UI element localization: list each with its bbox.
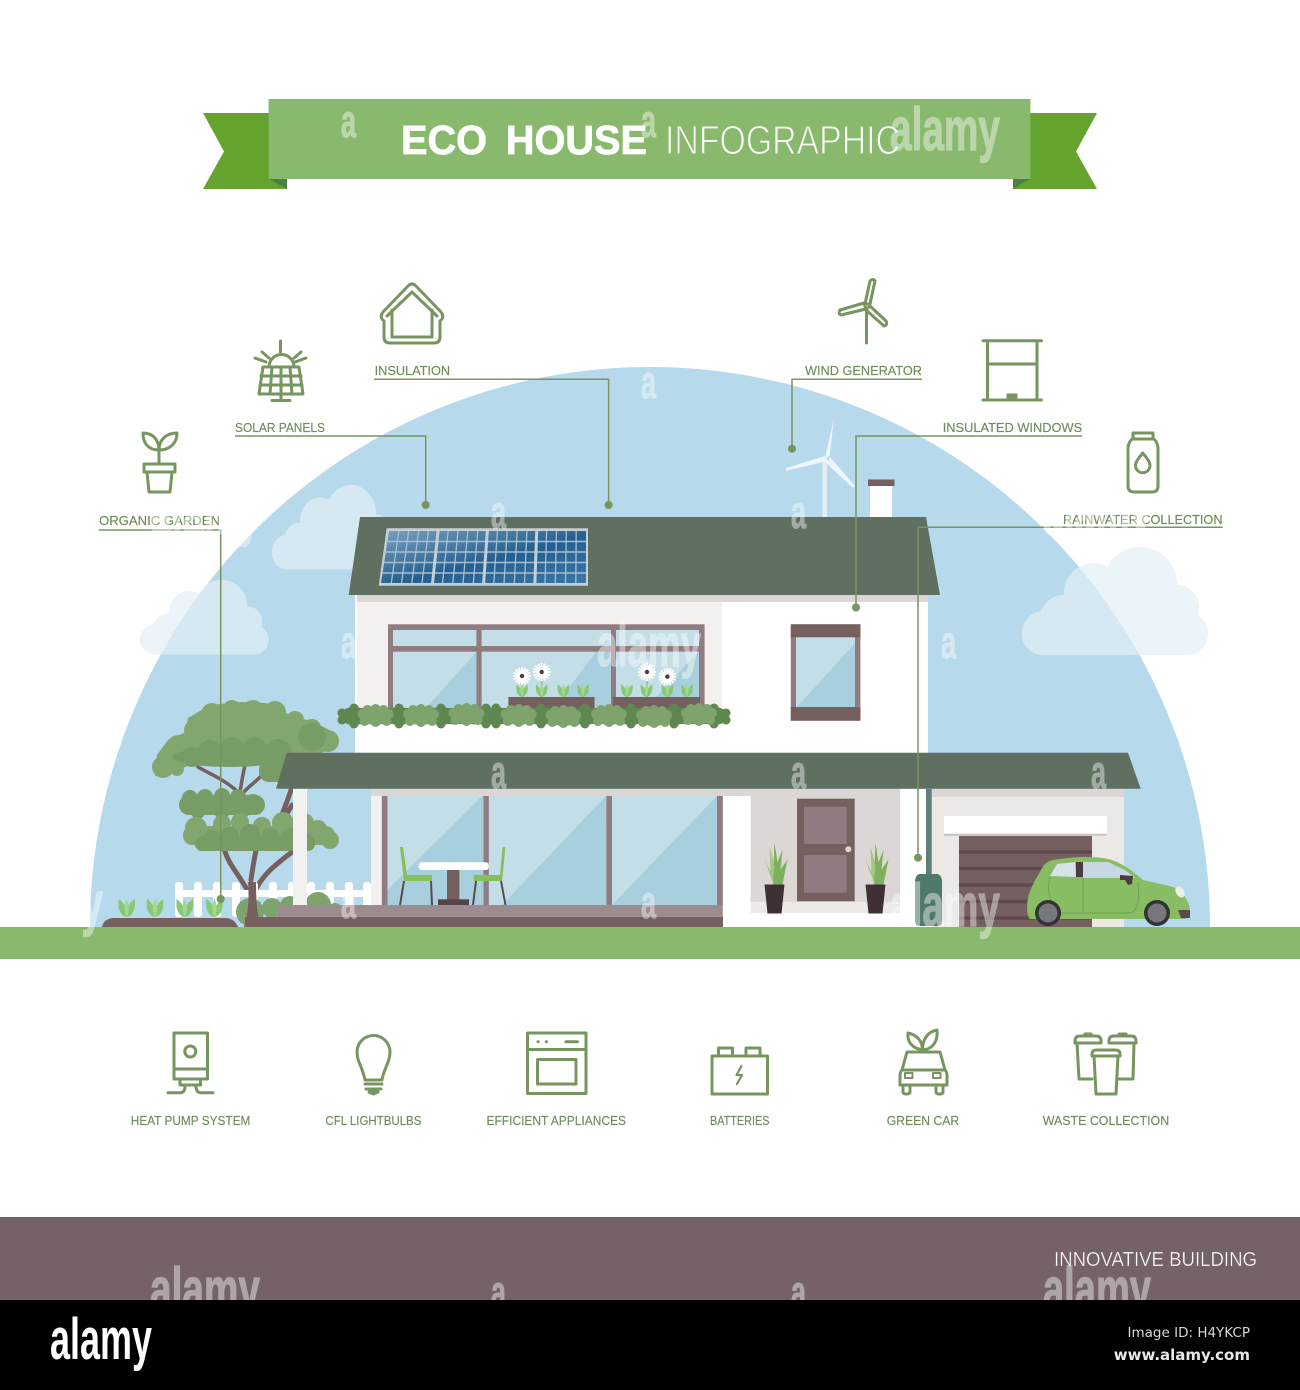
tree trunk bbox=[244, 882, 261, 927]
label: INSULATION bbox=[375, 363, 450, 378]
leader line bbox=[99, 530, 225, 903]
upper wall shaded part bbox=[357, 602, 722, 724]
stock watermarks: a bbox=[491, 1266, 506, 1318]
stock watermarks: a bbox=[641, 95, 656, 147]
tree middle crown bbox=[179, 788, 265, 820]
wind turbine bbox=[786, 418, 855, 518]
label: BATTERIES bbox=[710, 1113, 770, 1128]
chimney bbox=[868, 480, 894, 518]
callout: organic garden bbox=[99, 433, 225, 903]
image id: Image ID: H4YKCP bbox=[1128, 1325, 1250, 1341]
ground floor wall bbox=[371, 789, 931, 927]
feature: batteries bbox=[710, 1048, 770, 1128]
porch bushes bbox=[236, 892, 343, 926]
patio glazing bbox=[382, 796, 723, 905]
stock watermarks: a bbox=[791, 746, 806, 798]
deck bbox=[278, 905, 723, 917]
feature row bbox=[131, 1030, 1169, 1128]
stock watermarks: alamy bbox=[597, 612, 701, 679]
label: EFFICIENT APPLIANCES bbox=[486, 1113, 626, 1128]
stock watermarks: a bbox=[641, 356, 656, 408]
callout: wind generator bbox=[788, 280, 922, 453]
callout: insulation bbox=[374, 284, 613, 509]
stock watermarks: a bbox=[341, 616, 356, 668]
icon: car with leaves bbox=[900, 1030, 947, 1094]
garage bbox=[932, 789, 1124, 927]
right upper window bbox=[791, 624, 860, 721]
icon: battery bbox=[712, 1048, 768, 1094]
title subtitle: INFOGRAPHIC bbox=[665, 117, 900, 163]
stock watermarks: alamy bbox=[150, 1256, 260, 1323]
banner title ribbon bbox=[203, 99, 1097, 189]
porch alcove bbox=[751, 789, 900, 913]
tree lower crown bbox=[183, 812, 339, 849]
stock watermarks: a bbox=[1091, 746, 1106, 798]
stock watermarks: a bbox=[341, 95, 356, 147]
feature: green car bbox=[887, 1030, 959, 1128]
ribbon tails bbox=[203, 113, 1097, 189]
potted plant right bbox=[866, 842, 888, 914]
bottom bar caption: INNOVATIVE BUILDING bbox=[1054, 1249, 1257, 1271]
flowers bbox=[513, 663, 693, 697]
footer strip bbox=[0, 1300, 1300, 1390]
ribbon band bbox=[269, 99, 1030, 179]
house bbox=[245, 517, 1141, 927]
upper soffit bbox=[357, 595, 928, 602]
icon: waste bins bbox=[1075, 1034, 1136, 1094]
stock watermarks: a bbox=[341, 876, 356, 928]
leader line bbox=[374, 379, 613, 509]
stock watermarks: a bbox=[491, 486, 506, 538]
icon: oven bbox=[528, 1033, 586, 1094]
label: SOLAR PANELS bbox=[235, 420, 325, 435]
soil bed bbox=[102, 918, 238, 927]
callout: insulated windows bbox=[852, 341, 1083, 612]
green car bbox=[1027, 857, 1190, 926]
icon: house bbox=[381, 284, 443, 343]
tree branches bbox=[198, 762, 292, 895]
picket fence bbox=[175, 882, 372, 917]
bottom bar bbox=[0, 1217, 1300, 1300]
label: GREEN CAR bbox=[887, 1113, 959, 1128]
ground strip bbox=[0, 927, 1300, 959]
front door bbox=[797, 799, 855, 901]
stock watermarks: alamy bbox=[890, 96, 1000, 163]
stock watermarks: a bbox=[941, 616, 956, 668]
callout: rainwater collection bbox=[914, 433, 1223, 862]
stock watermarks bbox=[0, 95, 1151, 1323]
label: WIND GENERATOR bbox=[805, 363, 922, 378]
footer logo: alamy bbox=[50, 1307, 152, 1372]
clouds bbox=[140, 485, 1208, 655]
leader line bbox=[852, 436, 1082, 612]
upper roof bbox=[349, 517, 940, 595]
icon: solar panel and sun bbox=[255, 341, 306, 400]
label: HEAT PUMP SYSTEM bbox=[131, 1113, 250, 1128]
icon: rainwater jar bbox=[1128, 433, 1158, 492]
label: INSULATED WINDOWS bbox=[943, 420, 1083, 435]
feature: efficient appliances bbox=[486, 1033, 626, 1128]
stock watermarks: alamy bbox=[1043, 480, 1151, 547]
balcony window bbox=[388, 624, 705, 710]
feature: cfl lightbulbs bbox=[325, 1036, 422, 1128]
title text: ECO HOUSE bbox=[401, 117, 647, 163]
balcony hedge bbox=[338, 703, 730, 728]
ground pillar bbox=[371, 796, 382, 905]
flower boxes bbox=[508, 697, 700, 709]
tree upper crown shade bbox=[172, 723, 326, 782]
patio table and chairs bbox=[400, 847, 506, 905]
tree bbox=[152, 700, 339, 895]
icon: heat pump bbox=[168, 1033, 213, 1093]
feature: waste collection bbox=[1043, 1034, 1169, 1128]
icon: wind turbine bbox=[839, 280, 887, 343]
icon: window bbox=[983, 341, 1042, 400]
stock watermarks: a bbox=[791, 486, 806, 538]
porch post bbox=[293, 789, 307, 905]
icon: lightbulb bbox=[357, 1036, 390, 1094]
stock watermarks: alamy bbox=[1043, 1256, 1151, 1323]
upper storey wall bbox=[355, 595, 928, 755]
callout: solar panels bbox=[235, 341, 430, 509]
label: RAINWATER COLLECTION bbox=[1063, 512, 1222, 527]
leader line bbox=[914, 527, 1223, 862]
lower roof bbox=[276, 753, 1141, 789]
garden sprouts bbox=[118, 899, 223, 917]
icon: potted plant bbox=[143, 433, 177, 492]
potted plant left bbox=[764, 842, 788, 914]
stock watermarks: a bbox=[791, 1266, 806, 1318]
stock watermarks: a bbox=[491, 746, 506, 798]
stock watermarks: alamy bbox=[890, 872, 1000, 939]
ground soffit bbox=[371, 789, 751, 796]
label: WASTE COLLECTION bbox=[1043, 1113, 1169, 1128]
sky dome bbox=[90, 367, 1210, 927]
ribbon folds bbox=[269, 179, 1030, 189]
site url: www.alamy.com bbox=[1114, 1346, 1250, 1364]
leader line bbox=[788, 379, 922, 453]
stock watermarks: alamy bbox=[150, 480, 260, 547]
label: ORGANIC GARDEN bbox=[99, 513, 220, 528]
tree upper crown bbox=[152, 700, 339, 778]
label: CFL LIGHTBULBS bbox=[325, 1113, 422, 1128]
rain water tank bbox=[915, 874, 942, 926]
stock watermarks: a bbox=[641, 876, 656, 928]
downpipe bbox=[926, 789, 932, 875]
solar panels bbox=[379, 528, 588, 586]
feature: heat pump system bbox=[131, 1033, 250, 1128]
leader line bbox=[235, 436, 430, 509]
